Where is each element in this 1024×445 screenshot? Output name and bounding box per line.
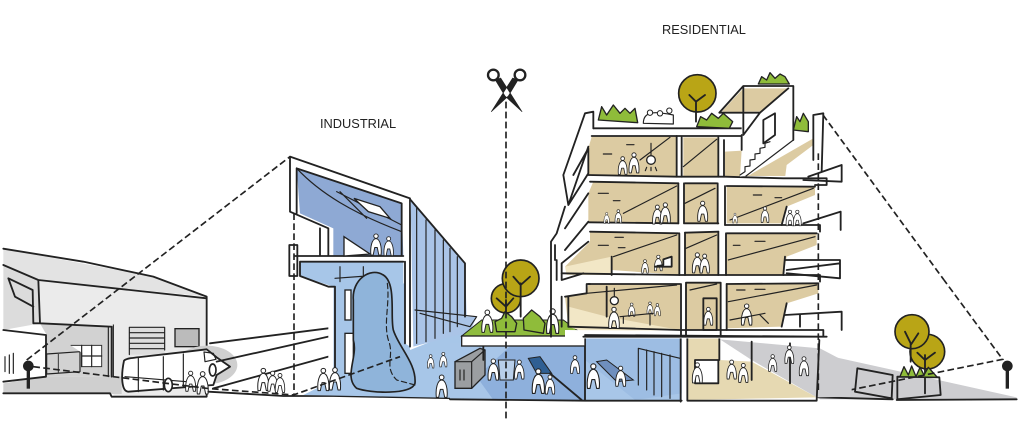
back wall left	[551, 207, 565, 337]
central dashed cut line	[503, 102, 508, 418]
building frame	[289, 157, 410, 383]
upper hall	[297, 168, 403, 256]
roof garden people	[482, 309, 559, 333]
stair and roof pavilion	[719, 86, 793, 177]
roof terrace people	[643, 108, 673, 124]
group of people	[258, 368, 285, 392]
warehouse	[3, 249, 237, 397]
planting	[900, 366, 937, 377]
right sightline upper	[823, 115, 944, 280]
tree back	[491, 284, 521, 323]
roof planters	[598, 73, 808, 132]
label: residential: RESIDENTIAL	[662, 22, 746, 37]
pendant lamps	[610, 143, 657, 305]
ground floor tan and grey	[687, 338, 852, 401]
label: industrial: INDUSTRIAL	[320, 116, 396, 131]
apartment rooms	[565, 88, 818, 332]
dark table	[528, 357, 552, 373]
grey shipping box	[455, 348, 485, 388]
road lines	[210, 328, 328, 388]
ground blue areas	[450, 338, 682, 400]
courtyard people	[488, 356, 626, 394]
van	[122, 346, 237, 392]
side facade	[411, 200, 477, 347]
structure lines	[562, 112, 827, 338]
ground line	[818, 397, 1017, 400]
tables	[498, 360, 633, 382]
roof tree	[679, 75, 733, 128]
ground line	[208, 392, 480, 399]
far tree	[910, 334, 945, 375]
stacked boxes	[47, 345, 102, 374]
right street ground and trees	[780, 280, 1017, 400]
tree front	[502, 260, 539, 317]
lower ceiling	[300, 262, 403, 287]
viewer marker	[23, 361, 34, 389]
scissors	[488, 70, 525, 112]
right balconies	[785, 113, 842, 393]
sightline	[820, 280, 1003, 396]
roof garden	[462, 310, 585, 346]
ground wedge	[780, 345, 1017, 399]
people upstairs	[371, 234, 393, 256]
viewer marker	[1002, 361, 1013, 389]
low wall	[855, 368, 893, 398]
trunk in planter	[922, 378, 928, 393]
meeting tables	[620, 257, 768, 325]
blue ground	[303, 283, 480, 398]
central courtyard and residential building	[450, 70, 852, 418]
courtyard lines	[450, 337, 682, 402]
people near van	[186, 371, 208, 394]
warehouse and industrial building	[3, 157, 480, 399]
left sightline	[27, 157, 400, 395]
loading door	[129, 327, 199, 355]
people by sculpture	[318, 352, 447, 397]
sculpture blob	[351, 272, 415, 392]
apartment people	[604, 153, 801, 328]
ribbed gate	[638, 348, 680, 398]
near tree	[895, 315, 929, 362]
planter	[897, 377, 941, 399]
